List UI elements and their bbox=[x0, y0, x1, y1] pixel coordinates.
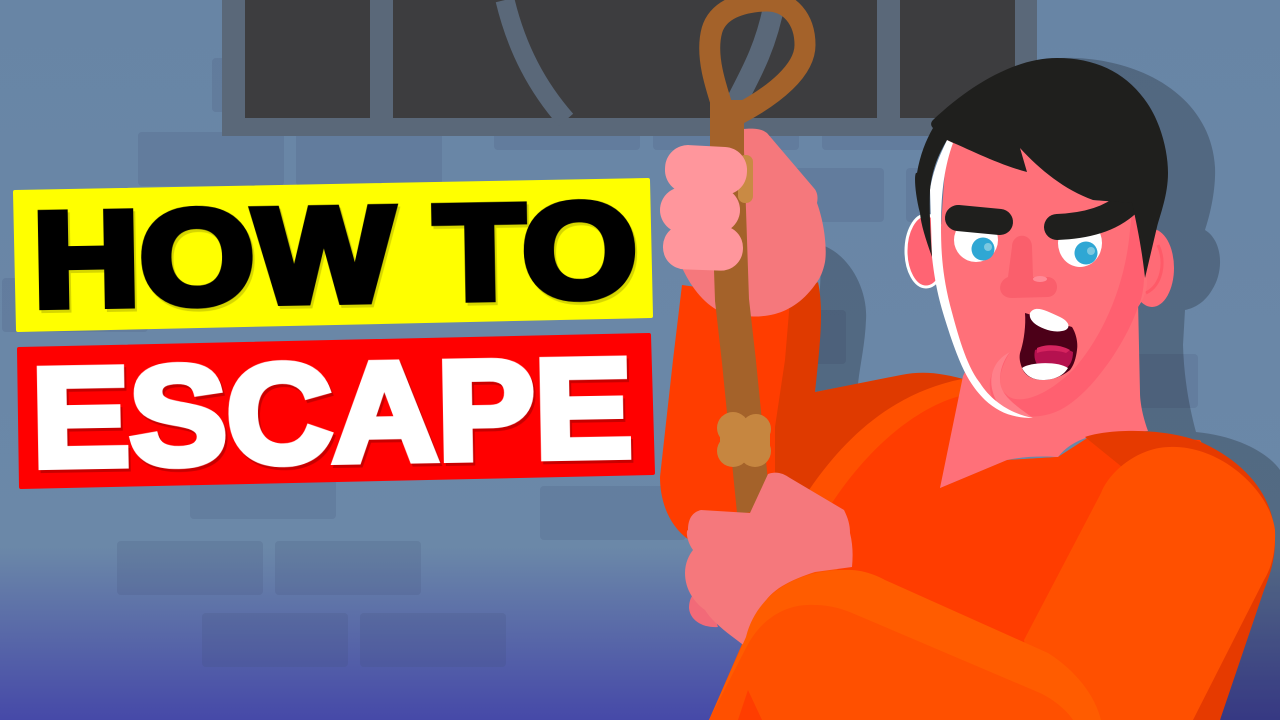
right shoulder shadow fold bbox=[1085, 431, 1275, 720]
eyes bbox=[954, 218, 1102, 267]
forearm cuff bbox=[709, 570, 1101, 720]
sleeve of raised arm bbox=[660, 282, 967, 540]
mouth bbox=[1020, 309, 1077, 380]
left ear bbox=[906, 215, 946, 287]
nose bbox=[1000, 236, 1057, 298]
eyebrows bbox=[958, 203, 1128, 227]
title label: how to: HOW TO bbox=[32, 176, 638, 335]
barred window bbox=[222, 0, 1037, 136]
face highlight bbox=[930, 140, 1033, 418]
rope coil behind fingers bbox=[738, 155, 753, 203]
neck bbox=[940, 300, 1148, 488]
hair bbox=[915, 58, 1168, 278]
face bbox=[938, 140, 1147, 418]
upper hand palm bbox=[680, 129, 826, 317]
title label: escape: ESCAPE bbox=[31, 329, 633, 496]
rope bbox=[710, 1, 805, 512]
right ear bbox=[1130, 229, 1174, 307]
character shadow bbox=[815, 58, 1280, 720]
rope knot bbox=[717, 412, 771, 467]
prisoner torso bbox=[709, 378, 1260, 720]
jaw shading bbox=[990, 203, 1144, 418]
wall bricks bbox=[2, 58, 1198, 667]
lower hand bbox=[685, 473, 853, 647]
right upper arm bbox=[1024, 447, 1275, 720]
upper hand fingers bbox=[660, 144, 748, 271]
